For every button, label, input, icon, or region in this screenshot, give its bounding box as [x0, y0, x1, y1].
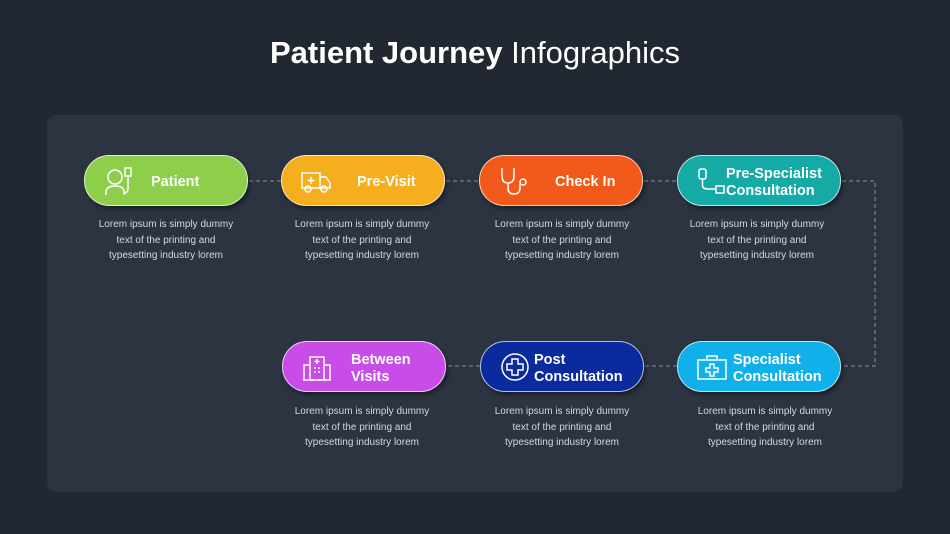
text: Between Visits: Lorem ipsum is simply dummy text of the printing and typesetting industry lorem: [295, 406, 429, 448]
step: Patient: Patient: [151, 174, 199, 190]
icon: patient: [105, 167, 132, 195]
step: Patient: [84, 155, 248, 206]
icon: hospital: [303, 356, 331, 381]
step: Specialist Consultation: Specialist: [733, 352, 801, 368]
icon: medical kit: [697, 355, 727, 380]
step: Post Consultation: Post: [534, 352, 565, 368]
step: Between Visits: Between: [351, 352, 411, 368]
text: Post Consultation: Lorem ipsum is simply dummy text of the printing and typesetting industry lorem: [495, 406, 629, 448]
step: Specialist Consultation: [677, 341, 841, 392]
step: Check In: Check In: [555, 174, 615, 190]
text: Pre-Specialist: Lorem ipsum is simply dummy text of the printing and typesetting industry lorem: [690, 219, 824, 261]
step: Between Visits: [282, 341, 446, 392]
step: Pre-Specialist Consultation: Pre-Specialist: [726, 166, 822, 182]
step: Check In: [479, 155, 643, 206]
icon: plus circle: [501, 353, 529, 381]
text: Check In: Lorem ipsum is simply dummy text of the printing and typesetting industry lorem: [495, 219, 629, 261]
icon: ambulance: [301, 172, 331, 193]
step: Pre-Specialist Consultation: [677, 155, 841, 206]
step: Pre-Visit: [281, 155, 445, 206]
step: Post Consultation: Consultation: [534, 368, 623, 384]
step: Post Consultation: [480, 341, 644, 392]
text: Specialist: Lorem ipsum is simply dummy text of the printing and typesetting industry lorem: [698, 406, 832, 448]
title: Patient Journey Infographics: [270, 35, 680, 70]
step: Pre-Visit: Pre-Visit: [357, 174, 416, 190]
icon: stethoscope: [501, 168, 527, 195]
panel: [47, 115, 903, 492]
step: Specialist Consultation: Consultation: [733, 368, 822, 384]
text: Patient: Lorem ipsum is simply dummy text of the printing and typesetting industry lorem: [99, 219, 233, 261]
step: Pre-Specialist Consultation: Consultation: [726, 182, 815, 198]
icon: iv drip: [698, 168, 725, 194]
step: Between Visits: Visits: [351, 368, 389, 384]
text: Pre-Visit: Lorem ipsum is simply dummy text of the printing and typesetting industry lorem: [295, 219, 429, 261]
